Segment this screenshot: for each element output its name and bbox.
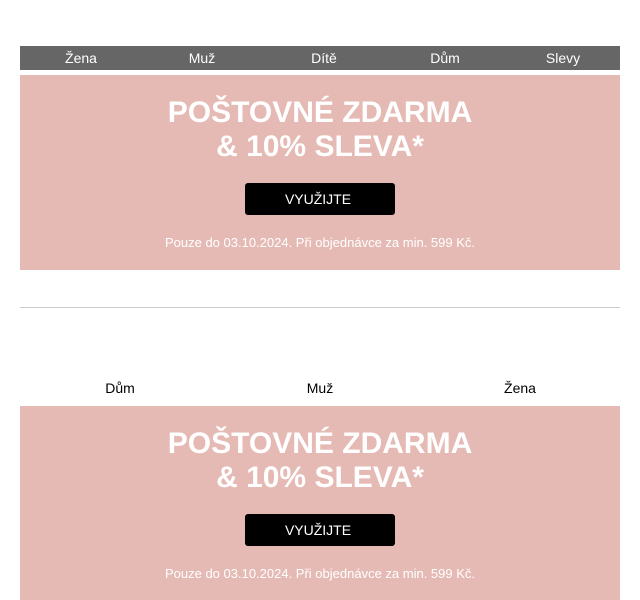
navigation bar: top categories [20,46,620,70]
heading: free shipping and discount: & 10% SLEVA* [216,130,424,163]
text: offer terms: Pouze do 03.10.2024. Při objednávce za min. 599 Kč. [165,566,475,581]
navigation row: secondary categories [105,380,536,396]
navigation row: secondary categories: Žena [504,380,536,396]
navigation row: secondary categories: Muž [307,380,333,396]
heading: free shipping and discount: & 10% SLEVA* [216,461,424,494]
heading: free shipping and discount: POŠTOVNÉ ZDARMA [168,427,472,460]
heading: free shipping and discount: POŠTOVNÉ ZDARMA [168,96,472,129]
heading: free shipping and discount [168,95,472,163]
navigation bar: top categories: Slevy [546,50,580,66]
button: využijte [245,183,395,215]
navigation row: secondary categories: Dům [105,380,135,396]
text: offer terms: Pouze do 03.10.2024. Při objednávce za min. 599 Kč. [165,235,475,250]
navigation bar: top categories: Dům [430,50,460,66]
navigation bar: top categories: Žena [65,50,97,66]
button: využijte [245,514,395,546]
panel: promo banner 2 [20,406,620,600]
navigation bar: top categories: Dítě [311,50,337,66]
navigation bar: top categories: Muž [189,50,215,66]
panel: promo banner 1 [20,75,620,270]
button: využijte: VYUŽIJTE [285,522,351,538]
button: využijte: VYUŽIJTE [285,191,351,207]
heading: free shipping and discount [168,426,472,494]
